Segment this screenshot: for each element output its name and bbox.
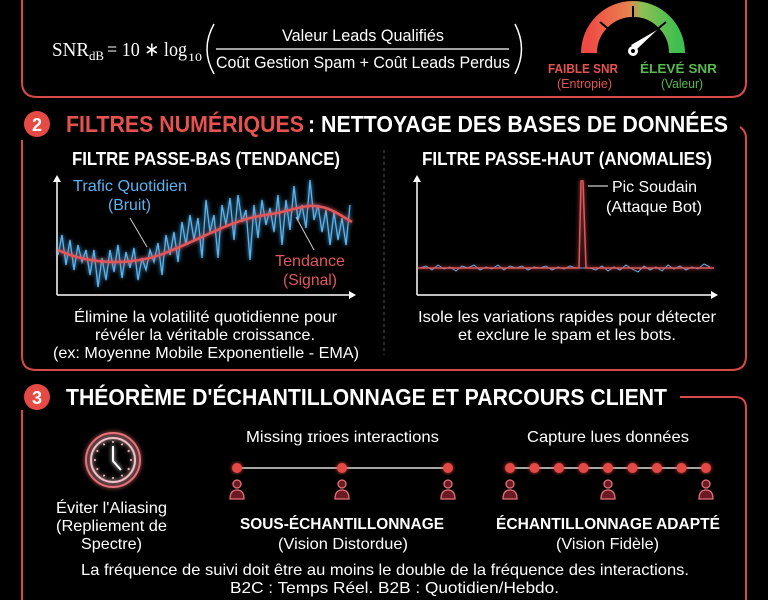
footer note: B2C : Temps Réel. B2B : Quotidien/Hebdo.: [230, 580, 559, 597]
gauge: ÉLEVÉ SNR: [640, 61, 718, 76]
under-sampling timeline: [230, 429, 455, 553]
low-pass filter block: (Bruit): [108, 197, 151, 214]
section 2 heading: : NETTOYAGE DES BASES DE DONNÉES: [308, 110, 728, 137]
gauge: (Entropie): [557, 76, 612, 91]
adapted sampling timeline: Capture lues données: [527, 429, 689, 446]
high-pass filter block: (Attaque Bot): [606, 199, 702, 216]
panel 3: sampling: Spectre): [81, 536, 142, 553]
formula: [52, 24, 522, 74]
under-sampling timeline: SOUS-ÉCHANTILLONNAGE: [240, 514, 444, 533]
footer note: La fréquence de suivi doit être au moins le double de la fréquence des interactions.: [81, 562, 689, 579]
adapted sampling timeline: [496, 429, 720, 553]
gauge: [548, 6, 718, 91]
formula: = 10 ∗ log: [107, 39, 187, 61]
adapted sampling timeline: ÉCHANTILLONNAGE ADAPTÉ: [496, 514, 720, 533]
high-pass filter block: Pic Soudain: [612, 179, 697, 196]
panel 1: SNR formula: [22, 0, 746, 97]
low-pass filter block: [53, 149, 359, 362]
high-pass filter block: [413, 149, 718, 344]
low-pass filter block: Trafic Quotidien: [73, 178, 187, 195]
high-pass filter block: et exclure le spam et les bots.: [458, 327, 676, 344]
formula: Valeur Leads Qualifiés: [282, 26, 444, 45]
panel 3: sampling: (Repliement de: [56, 518, 167, 535]
low-pass filter block: FILTRE PASSE-BAS (TENDANCE): [72, 149, 340, 169]
under-sampling timeline: (Vision Distordue): [278, 536, 408, 553]
trend line: [58, 206, 352, 262]
section 3 heading: THÉORÈME D'ÉCHANTILLONNAGE ET PARCOURS CLIENT: [66, 383, 667, 410]
low-pass filter block: Tendance: [275, 253, 345, 270]
high-pass filter block: FILTRE PASSE-HAUT (ANOMALIES): [422, 149, 712, 169]
gauge: FAIBLE SNR: [548, 61, 619, 76]
panel 3: sampling: Éviter l'Aliasing: [56, 498, 167, 517]
panel 2: filters: [22, 127, 746, 370]
formula: Coût Gestion Spam + Coût Leads Perdus: [216, 53, 510, 72]
formula: dB: [89, 48, 104, 63]
section 2 heading: [24, 110, 728, 137]
icon: clock: [86, 433, 140, 487]
formula: 10: [188, 50, 202, 64]
low-pass filter block: (Signal): [283, 272, 337, 289]
section 3 heading: 3: [32, 388, 42, 408]
low-pass filter block: (ex: Moyenne Mobile Exponentielle - EMA): [53, 345, 359, 362]
formula: SNR: [52, 39, 90, 61]
section 2 heading: 2: [32, 115, 42, 135]
high-pass filter block: Isole les variations rapides pour détecter: [418, 309, 717, 326]
low-pass filter block: Élimine la volatilité quotidienne pour: [74, 307, 338, 326]
section 2 heading: FILTRES NUMÉRIQUES: [66, 110, 304, 137]
adapted sampling timeline: (Vision Fidèle): [556, 536, 659, 553]
low-pass filter block: révéler la véritable croissance.: [95, 327, 315, 344]
gauge: (Valeur): [661, 76, 703, 91]
noise line: [58, 180, 350, 287]
under-sampling timeline: Missing ɪrioes interactions: [246, 429, 439, 446]
panel 3: sampling: [22, 397, 746, 600]
footer note: [81, 562, 689, 597]
